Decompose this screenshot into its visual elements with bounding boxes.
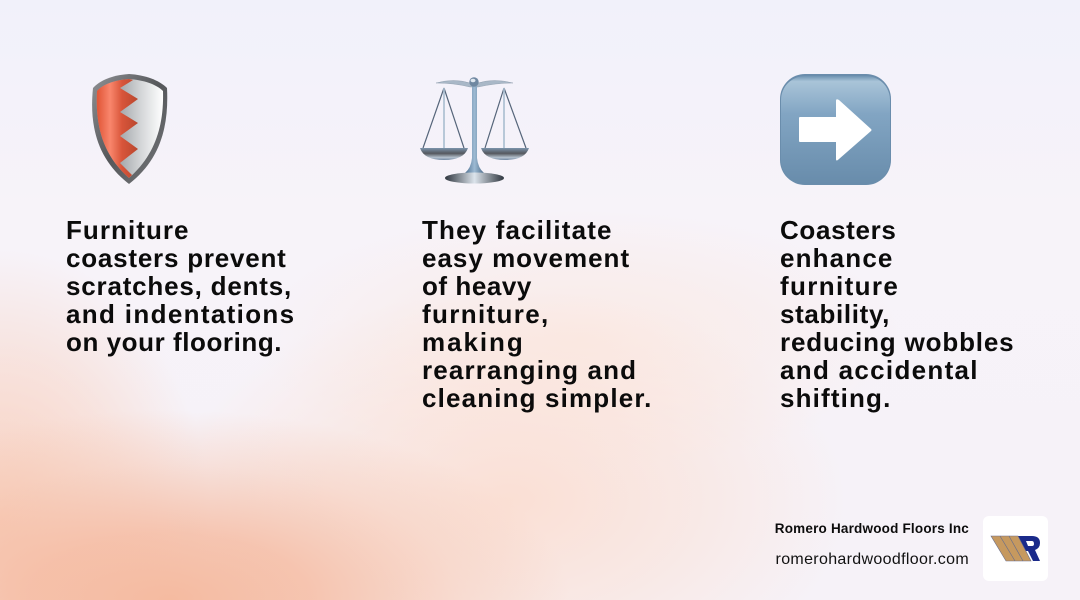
icon: logo [990, 536, 1040, 562]
text: column 2: making [422, 327, 525, 357]
text: column 2: easy movement [422, 243, 630, 273]
text: column 3: furniture [780, 271, 899, 301]
icon: balance scale [420, 77, 529, 184]
text: column 3 [780, 215, 1014, 413]
text: column 1: scratches, dents, [66, 271, 292, 301]
text: column 2: of heavy [422, 271, 532, 301]
text: column 1 [66, 215, 295, 357]
text: column 2 [422, 215, 653, 413]
text: column 3: enhance [780, 243, 894, 273]
company name: Romero Hardwood Floors Inc [775, 521, 969, 536]
logo card [983, 516, 1048, 581]
text: column 3: reducing wobbles [780, 327, 1014, 357]
text: column 2: They facilitate [422, 215, 613, 245]
text: column 1: and indentations [66, 299, 295, 329]
icon: shield [92, 74, 168, 184]
text: column 1: coasters prevent [66, 243, 287, 273]
text: column 2: cleaning simpler. [422, 383, 653, 413]
text: column 3: and accidental [780, 355, 979, 385]
text: column 2: furniture, [422, 299, 550, 329]
website: romerohardwoodfloor.com [776, 551, 969, 568]
text: column 2: rearranging and [422, 355, 637, 385]
icon: right arrow button [780, 74, 891, 185]
text: column 3: stability, [780, 299, 890, 329]
text: column 1: on your flooring. [66, 327, 282, 357]
text: column 3: Coasters [780, 215, 896, 245]
text: column 1: Furniture [66, 215, 190, 245]
text: column 3: shifting. [780, 383, 891, 413]
